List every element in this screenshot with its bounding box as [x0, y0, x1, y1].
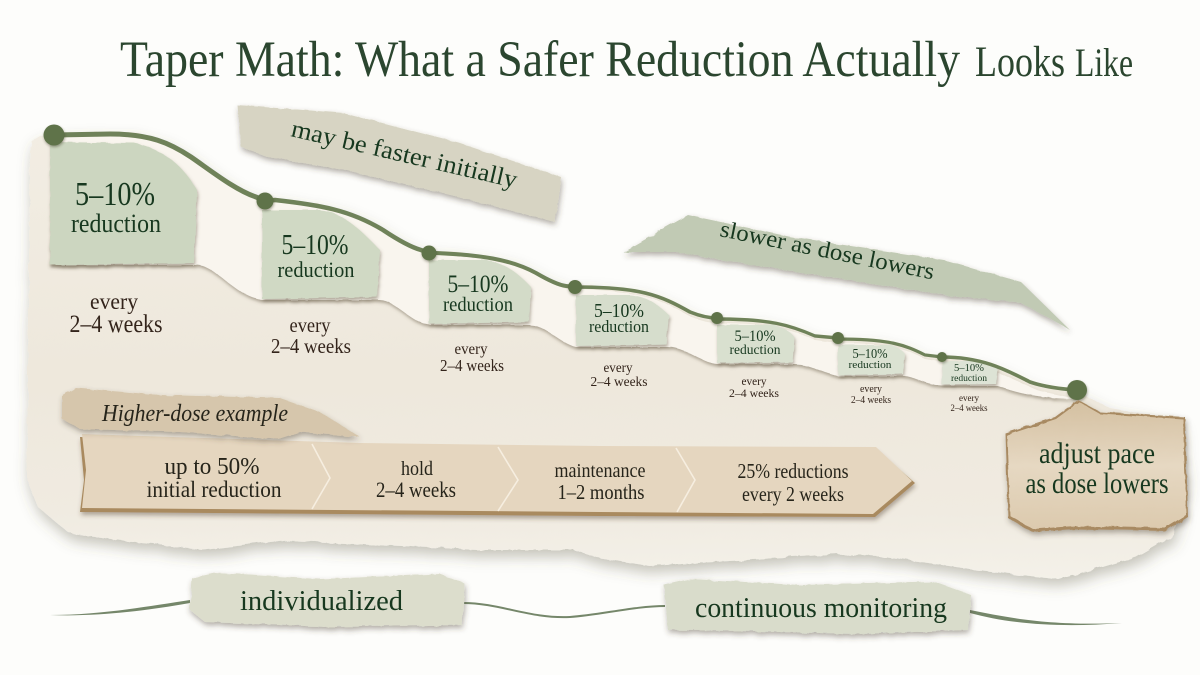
- step 3: 5-10% reduction: reduction: [443, 294, 513, 316]
- step 6 interval: every: [860, 384, 882, 395]
- step 5 interval: every: [742, 374, 766, 388]
- step 1 interval: every: [90, 289, 138, 314]
- arrow segment: maintenance: 1–2 months: [558, 480, 644, 504]
- tag: individualized: [190, 573, 465, 627]
- step 6 interval: 2–4 weeks: [851, 395, 891, 406]
- step 1 interval: 2–4 weeks: [70, 311, 162, 338]
- callout: adjust pace as dose lowers: as dose lowers: [1026, 467, 1168, 500]
- callout: adjust pace as dose lowers: [1005, 400, 1188, 532]
- step 2 interval: every: [290, 315, 330, 337]
- arrow segment: up to 50%: up to 50%: [164, 454, 260, 480]
- step 7 interval: [950, 393, 988, 413]
- step 7: 5-10% reduction: 5–10%: [954, 362, 984, 374]
- step 4: 5-10% reduction: [576, 295, 669, 346]
- step 7 interval: 2–4 weeks: [950, 403, 988, 413]
- step 4: 5-10% reduction: reduction: [589, 317, 649, 336]
- step 5: 5-10% reduction: reduction: [730, 342, 781, 357]
- step 2: 5-10% reduction: [262, 210, 380, 299]
- arrow segment: up to 50%: initial reduction: [146, 477, 282, 502]
- step 4 interval: 2–4 weeks: [590, 375, 648, 390]
- title: Like: [1075, 40, 1133, 85]
- step 3: 5-10% reduction: [429, 260, 531, 324]
- step 1: 5-10% reduction: 5–10%: [75, 176, 155, 213]
- step 4 interval: [590, 361, 648, 390]
- step 3 interval: 2–4 weeks: [440, 356, 504, 375]
- connector line: left of individualized: [50, 600, 190, 615]
- step 2: 5-10% reduction: reduction: [278, 257, 354, 282]
- tag: individualized: individualized: [240, 586, 403, 617]
- arrow segment: 25% reductions: [738, 459, 848, 506]
- higher-dose timeline arrow: [80, 434, 915, 517]
- callout: may be faster initially: may be faster initially: [289, 116, 520, 194]
- step 6 interval: [851, 384, 891, 406]
- callout: adjust pace as dose lowers: adjust pace: [1039, 437, 1155, 470]
- arrow segment: 25% reductions: 25% reductions: [738, 459, 848, 483]
- step 2 interval: 2–4 weeks: [271, 334, 351, 358]
- connector line: right of continuous monitoring: [970, 610, 1122, 625]
- panel: torn paper staircase background: [27, 132, 1186, 580]
- step 2 interval: [271, 315, 351, 358]
- arrow segment: hold: 2–4 weeks: [376, 477, 456, 502]
- panel: light ribbon under descending curve: [50, 136, 1077, 399]
- step 1: 5-10% reduction: reduction: [71, 209, 161, 238]
- step 4: 5-10% reduction: 5–10%: [594, 300, 644, 322]
- label: higher-dose example: Higher-dose example: [101, 401, 288, 427]
- callout: may be faster initially: [237, 105, 561, 222]
- step 5 interval: 2–4 weeks: [729, 386, 779, 400]
- arrow segment: 25% reductions: every 2 weeks: [742, 482, 844, 506]
- step 5 interval: [729, 374, 779, 400]
- step 7: 5-10% reduction: [942, 361, 998, 385]
- step 3 interval: [440, 341, 504, 375]
- step 6: 5-10% reduction: [838, 345, 905, 375]
- step 7 interval: every: [959, 393, 979, 403]
- arrow segment: maintenance: maintenance: [554, 460, 646, 482]
- step 5: 5-10% reduction: [717, 325, 795, 363]
- arrow segment: hold: [376, 458, 456, 502]
- step 1: 5-10% reduction: [50, 142, 197, 265]
- step 2: 5-10% reduction: 5–10%: [282, 230, 348, 261]
- step 1 interval: [70, 289, 162, 338]
- tag: continuous monitoring: continuous monitoring: [695, 593, 947, 624]
- step 5: 5-10% reduction: 5–10%: [734, 328, 776, 345]
- step 3 interval: every: [454, 341, 488, 358]
- arrow segment: up to 50%: [146, 454, 282, 502]
- arrow segment: maintenance: [554, 460, 646, 504]
- label: higher-dose example: [62, 388, 360, 439]
- step 7: 5-10% reduction: reduction: [951, 374, 987, 384]
- step 6: 5-10% reduction: reduction: [848, 359, 892, 371]
- connector line: between tags: [463, 603, 665, 617]
- callout: slower as dose lowers: [623, 215, 1069, 329]
- title: Taper Math: What a Safer Reduction Actually: [120, 32, 960, 88]
- arrow segment: hold: hold: [401, 458, 433, 480]
- descending taper curve with dots: [44, 124, 1087, 400]
- step 4 interval: every: [604, 361, 632, 376]
- tag: continuous monitoring: [664, 579, 971, 634]
- step 3: 5-10% reduction: 5–10%: [448, 271, 508, 298]
- step 6: 5-10% reduction: 5–10%: [852, 346, 888, 361]
- title: Looks: [975, 39, 1065, 86]
- callout: slower as dose lowers: slower as dose lowers: [718, 216, 937, 285]
